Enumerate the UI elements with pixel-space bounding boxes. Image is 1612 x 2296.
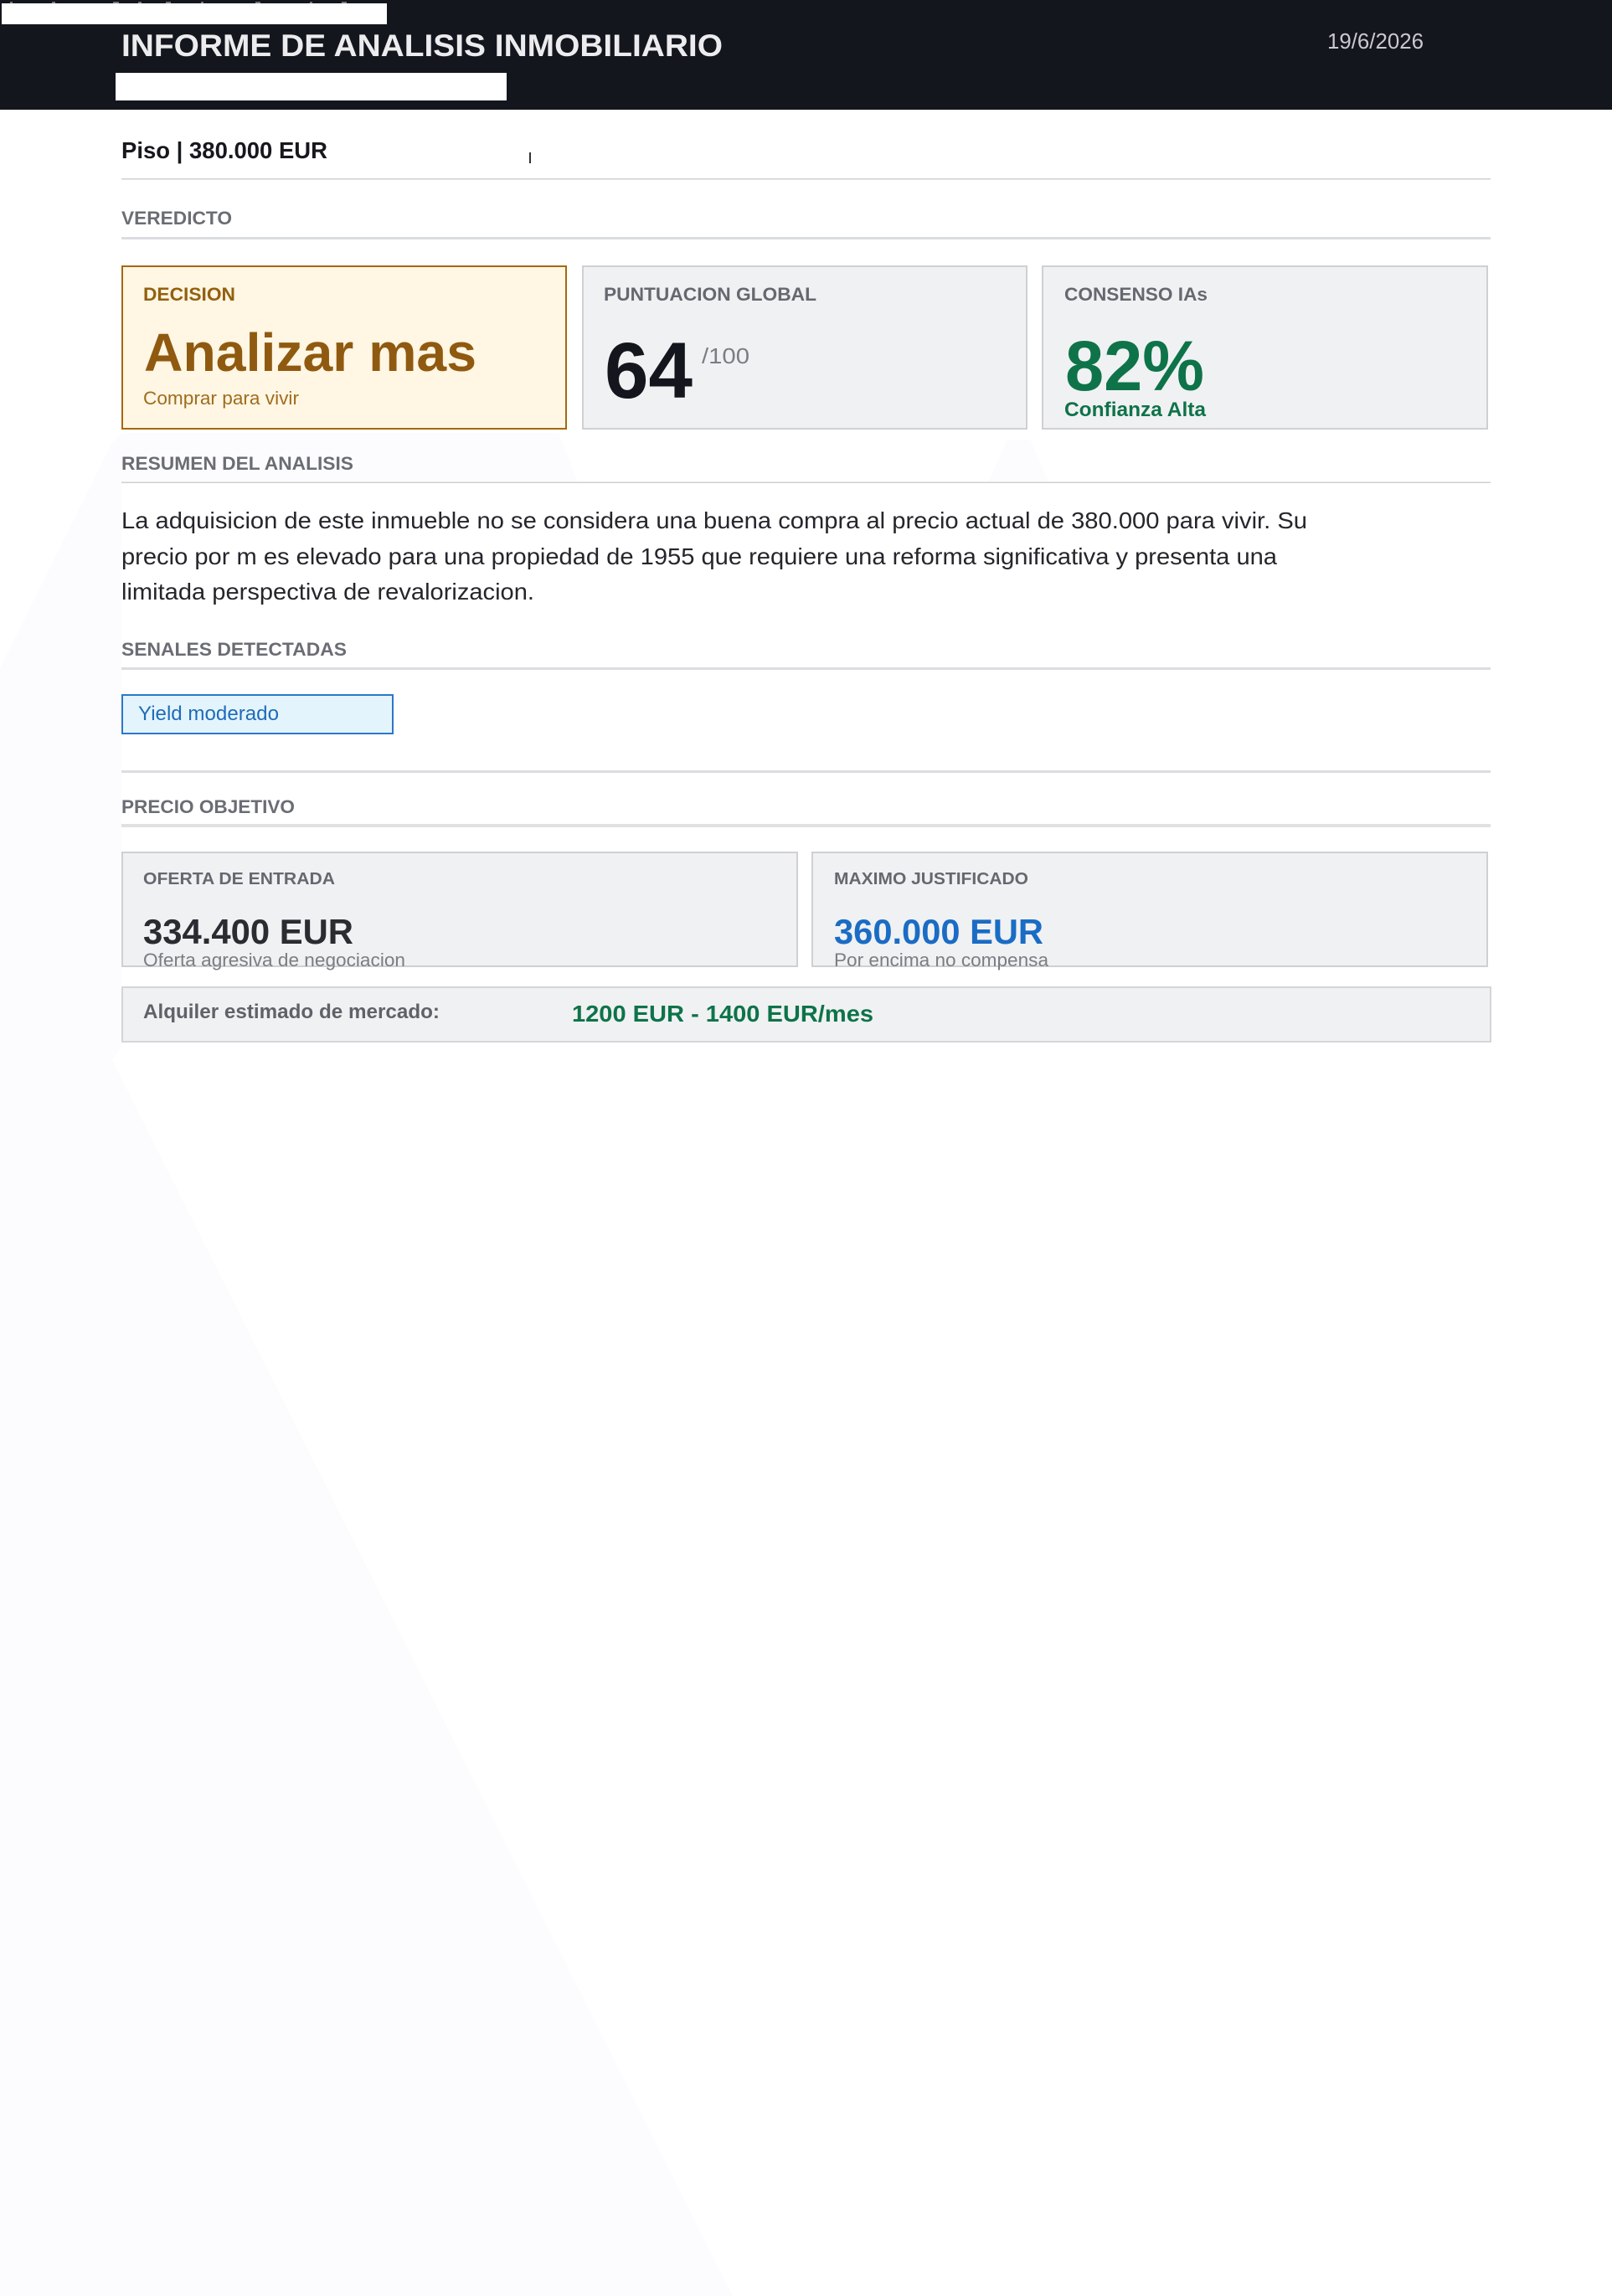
report date: 19/6/2026 (1327, 28, 1424, 54)
score label: PUNTUACION GLOBAL (604, 284, 816, 305)
heading: senales detectadas (121, 639, 1491, 670)
maximum note: Por encima no compensa (834, 950, 1049, 970)
redacted box: top left (2, 3, 387, 24)
panel: consenso IAs (1043, 266, 1487, 429)
rent label: Alquiler estimado de mercado: (143, 1001, 440, 1023)
heading: precio objetivo: PRECIO OBJETIVO (121, 796, 295, 817)
text block: summary paragraph (121, 507, 1307, 605)
decision value: Analizar mas (144, 322, 476, 383)
panel: oferta de entrada (122, 852, 797, 970)
offer value: 334.400 EUR (143, 912, 353, 951)
score value: 64 (605, 327, 693, 415)
property summary line: Piso | 380.000 EUR (121, 137, 327, 163)
panel: alquiler estimado (122, 987, 1491, 1042)
consensus value: 82% (1065, 327, 1204, 405)
heading: veredicto: VEREDICTO (121, 208, 232, 229)
panel: puntuacion global (583, 266, 1027, 429)
maximum label: MAXIMO JUSTIFICADO (834, 870, 1028, 888)
maximum value: 360.000 EUR (834, 912, 1043, 951)
header band (0, 0, 1612, 110)
panel: maximo justificado (812, 852, 1487, 970)
text block: summary paragraph: precio por m es elevado para una propiedad de 1955 que requiere una reforma significativa y presenta una (121, 543, 1277, 569)
decision label: DECISION (143, 284, 235, 305)
confidence note: Confianza Alta (1064, 399, 1207, 421)
text block: summary paragraph: limitada perspectiva de revalorizacion. (121, 579, 534, 605)
redacted box: subtitle (116, 73, 507, 100)
heading: senales detectadas: SENALES DETECTADAS (121, 639, 347, 660)
rent value: 1200 EUR - 1400 EUR/mes (572, 1001, 873, 1027)
heading: precio objetivo (121, 796, 1491, 827)
panel: decision (122, 266, 566, 429)
heading: resumen del analisis: RESUMEN DEL ANALISIS (121, 453, 353, 474)
text block: summary paragraph: La adquisicion de este inmueble no se considera una buena compra al precio actual de 380.000 para vivir. Su (121, 507, 1307, 533)
title: INFORME DE ANALISIS INMOBILIARIO (121, 28, 723, 63)
score scale: /100 (702, 343, 749, 368)
consensus label: CONSENSO IAs (1064, 284, 1208, 305)
offer note: Oferta agresiva de negociacion (143, 950, 405, 970)
decision purpose: Comprar para vivir (143, 388, 299, 409)
heading: veredicto (121, 208, 1491, 239)
signal tag: yield moderado: Yield moderado (138, 703, 279, 725)
offer label: OFERTA DE ENTRADA (143, 870, 335, 888)
signal tag: yield moderado (122, 695, 393, 734)
